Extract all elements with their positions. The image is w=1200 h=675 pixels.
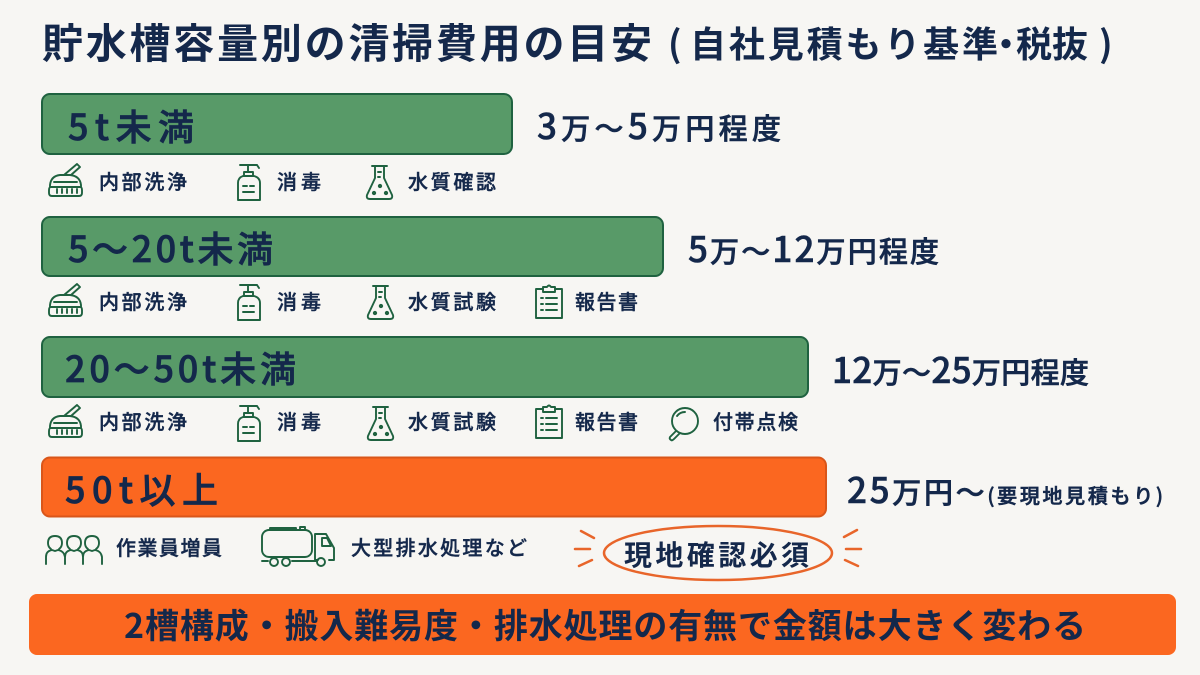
bar label: 20〜50t未満 xyxy=(65,341,296,393)
icon: brush xyxy=(49,164,82,196)
price: 25万円〜(要現地見積もり) xyxy=(847,463,1163,514)
callout: on-site check required xyxy=(575,526,861,580)
icon: flask xyxy=(368,407,393,440)
label: 大型排水処理など: 大型排水処理など xyxy=(351,532,527,561)
label: 内部洗浄: 内部洗浄 xyxy=(99,286,187,315)
bar: 5t未満 xyxy=(42,94,512,154)
bar label: 50t以上 xyxy=(65,462,218,514)
panel: tier 5 to 20t xyxy=(42,217,939,320)
icon: bottle xyxy=(238,165,260,200)
label: 内部洗浄: 内部洗浄 xyxy=(99,406,187,435)
icon: bottle xyxy=(238,285,260,320)
title: ) xyxy=(1099,16,1113,68)
icon: report xyxy=(536,286,562,318)
label: 消毒: 消毒 xyxy=(277,166,321,195)
icon: workers xyxy=(46,536,102,564)
bar: 20〜50t未満 xyxy=(42,337,808,397)
icon: bottle xyxy=(238,406,260,441)
label: 報告書: 報告書 xyxy=(575,406,638,435)
footer banner xyxy=(29,594,1176,655)
callout text: 現地確認必須 xyxy=(624,534,809,574)
label: 水質試験: 水質試験 xyxy=(408,406,496,435)
label: 水質試験: 水質試験 xyxy=(408,286,496,315)
price: 12万〜25万円程度 xyxy=(832,343,1089,394)
title: ・ xyxy=(988,16,1024,68)
icon: brush xyxy=(49,405,82,437)
icon: tanker truck xyxy=(262,527,334,566)
label: 内部洗浄: 内部洗浄 xyxy=(99,166,187,195)
icon: flask xyxy=(368,286,393,319)
bar: 50t以上 xyxy=(42,458,826,516)
title: 貯水槽容量別の清掃費用の目安 xyxy=(42,10,652,70)
icon: flask xyxy=(367,166,392,199)
label: 消毒: 消毒 xyxy=(277,286,321,315)
panel: tier 50t and over xyxy=(42,458,1163,580)
footer text: 2槽構成・搬入難易度・排水処理の有無で金額は大きく変わる xyxy=(124,599,1086,648)
panel: tier under 5t xyxy=(42,94,781,200)
label: 付帯点検: 付帯点検 xyxy=(713,406,798,435)
bar label: 5〜20t未満 xyxy=(68,221,273,273)
callout oval xyxy=(604,526,832,580)
label: 水質確認: 水質確認 xyxy=(408,166,496,195)
icon: report xyxy=(536,406,562,438)
bar: 5〜20t未満 xyxy=(42,217,663,276)
icon: magnifier xyxy=(670,408,698,440)
price: 5万〜12万円程度 xyxy=(688,222,939,273)
icon: brush xyxy=(49,284,82,316)
label: 消毒: 消毒 xyxy=(277,406,321,435)
panel: tier 20 to 50t xyxy=(42,337,1089,441)
bar label: 5t未満 xyxy=(68,99,194,151)
title xyxy=(42,10,1113,70)
title: 自社見積もり基準 xyxy=(690,16,998,68)
label: 作業員増員: 作業員増員 xyxy=(116,532,222,561)
callout rays xyxy=(575,530,861,566)
price: 3万〜5万円程度 xyxy=(537,99,781,150)
title: ( xyxy=(668,16,682,68)
label: 報告書: 報告書 xyxy=(575,286,638,315)
title: 税抜 xyxy=(1016,16,1088,68)
